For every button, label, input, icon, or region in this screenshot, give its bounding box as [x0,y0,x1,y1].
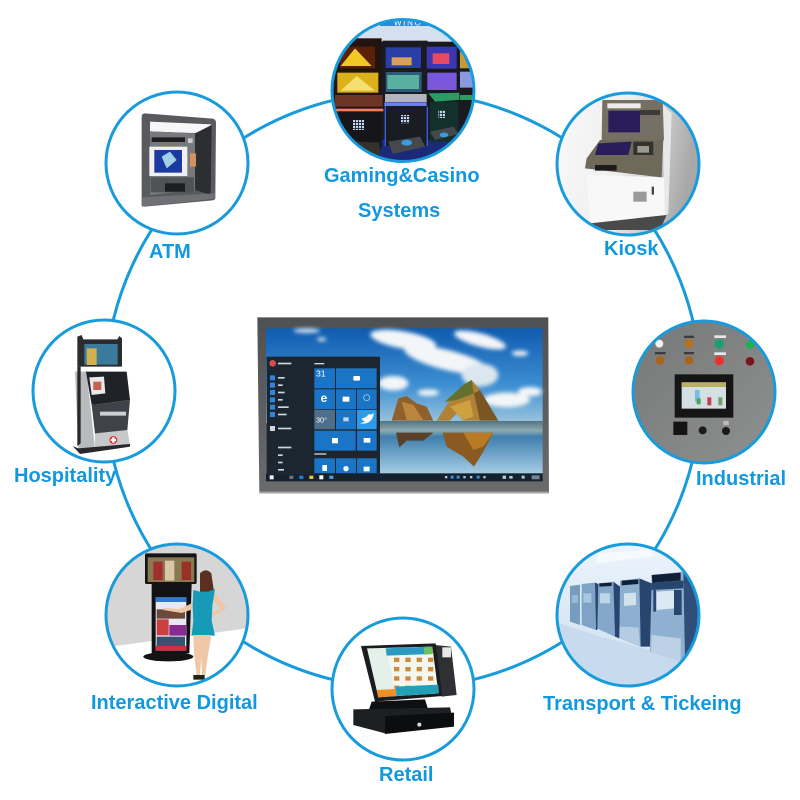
photo: control panel [634,322,774,462]
tile glyphs [316,369,374,471]
gaming ring [332,20,474,162]
interactive label: Interactive Digital [91,692,258,714]
machine 5 [650,572,685,662]
rocks [392,396,433,421]
tile glyphs: 30° [316,416,327,425]
printer [435,645,457,697]
photo: casino machines [334,21,472,160]
photo: kiosk [559,94,698,234]
photo: POS terminal [332,618,474,760]
machine 3 [597,582,615,637]
industrial label: Industrial [696,468,786,490]
transport label: Transport & Tickeing [543,693,742,715]
photo: interactive kiosk and woman [108,546,246,680]
photo: hospitality kiosk [33,320,175,462]
cabinet 2 [383,41,428,109]
HMI touch screen [675,374,733,418]
wallpaper sea [377,421,543,474]
monitor bezel [257,317,549,493]
machine 4 [618,578,641,647]
start menu tiles [314,368,377,473]
transport ring [557,544,699,686]
photo: casino machines: WINO [394,18,422,27]
hospitality ring [33,320,175,462]
node: interactive digital [91,540,258,714]
central monitor [257,317,549,493]
indicator lamps [655,340,663,348]
taskbar [266,473,543,481]
POS screen [361,643,442,702]
woman [200,570,214,594]
connecting ring [105,92,701,688]
node: ATM [106,92,248,263]
ATM label: ATM [149,241,191,263]
foot pedals [388,137,425,154]
cabinet 1 [333,38,382,113]
hospitality label: Hospitality [14,465,117,487]
photo: ticket machines [558,546,698,684]
node: retail [332,618,474,786]
switches [673,422,687,435]
node: industrial [630,318,786,490]
node: hospitality [14,320,175,487]
retail label: Retail [379,764,433,786]
cabinet 3 [427,43,458,107]
tile glyphs: e [321,391,328,405]
rock reflections [396,433,433,447]
gaming label: Gaming&Casino [324,165,480,187]
node: kiosk [550,90,700,260]
wallpaper sky [266,328,543,423]
industrial ring [633,321,775,463]
machine 1 [570,585,580,625]
retail ring [332,618,474,760]
cash drawer [368,699,428,712]
cabinet 4 [459,92,466,100]
ATM ring [106,92,248,234]
machine 2 [582,583,596,630]
start menu [267,357,380,473]
kiosk ring [557,93,699,235]
tile glyphs: 31 [316,369,326,379]
node: gaming and casino systems [324,17,480,222]
kiosk label: Kiosk [604,238,659,260]
systems label: Systems [358,200,440,222]
photo: ATM [106,92,248,234]
interactive ring [106,544,248,686]
node: transport and ticketing [543,540,742,715]
